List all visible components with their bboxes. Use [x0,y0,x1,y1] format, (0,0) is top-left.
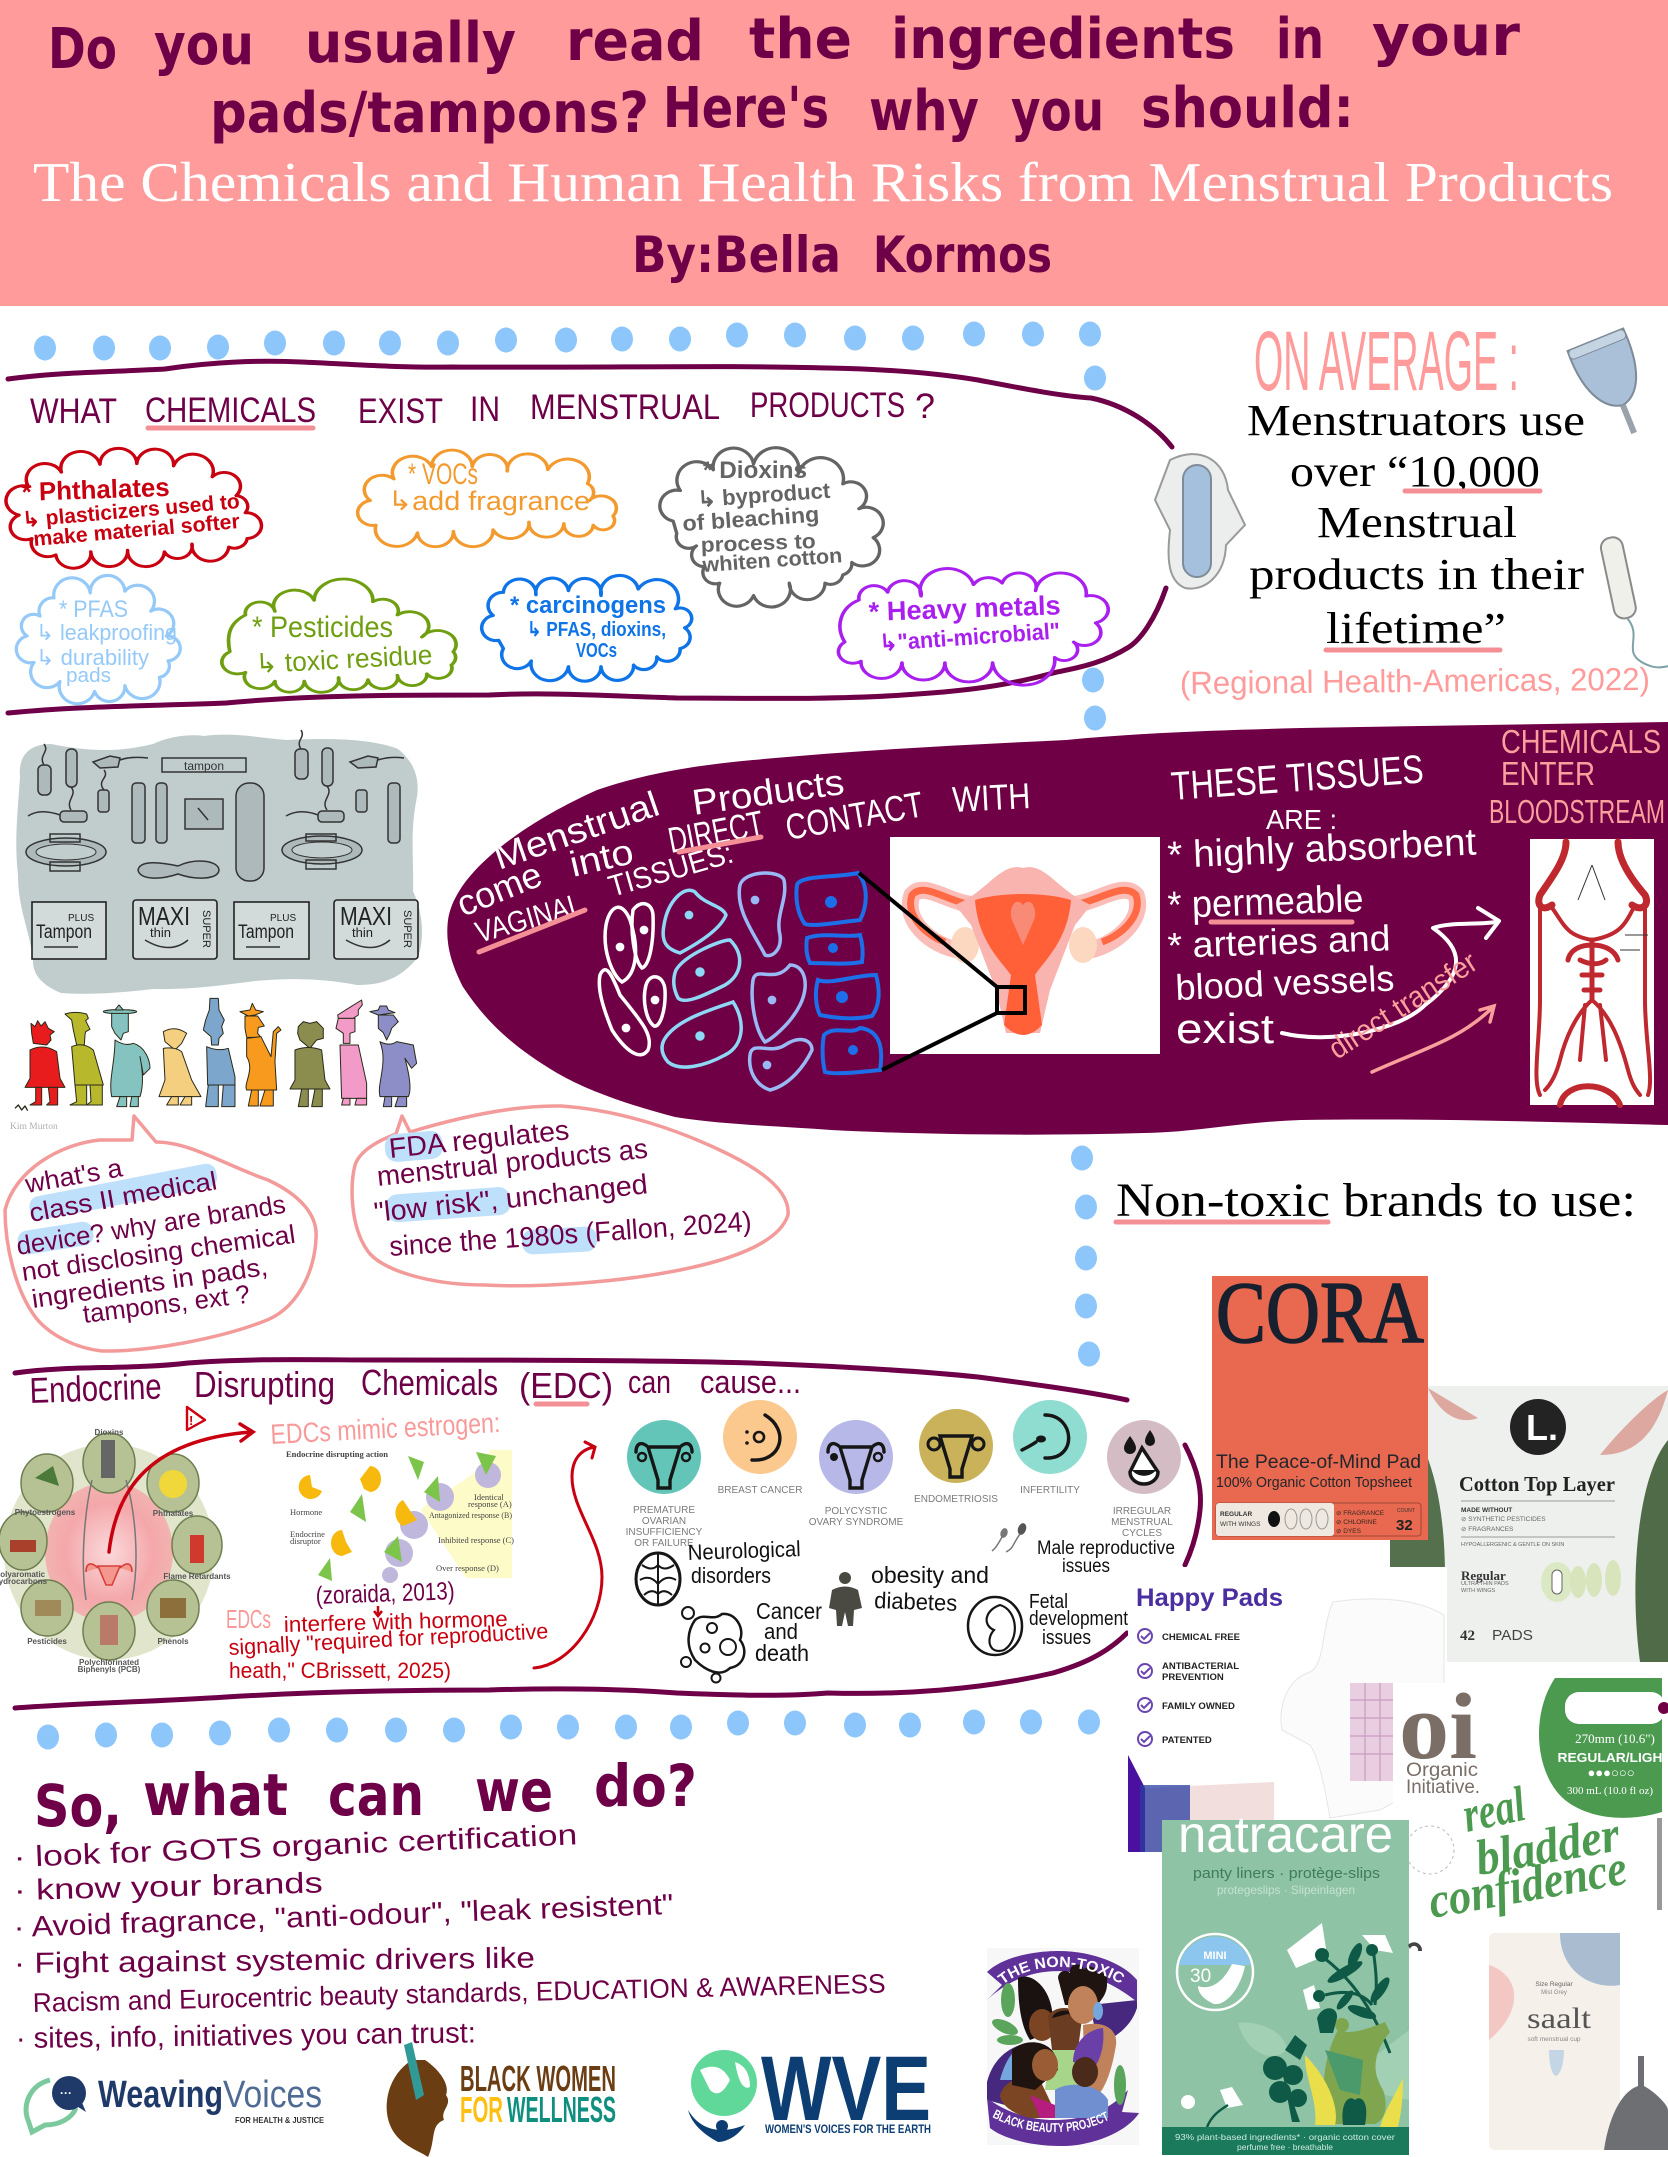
text: direct contact with vaginal tissues: into [566,830,637,885]
brand: happy pads: CHEMICAL FREE [1162,1632,1240,1643]
brand: L. cotton top layer: MADE WITHOUT [1461,1507,1512,1514]
arrow: white transfer arrow [1282,908,1499,1037]
quote text: products in their [1249,550,1584,599]
title: hand-lettered question: pads/tampons? [210,81,649,146]
icon: person with obesity and diabetes: diabetes [874,1587,958,1616]
health condition icons [626,1400,1181,1682]
speech bubble: FDA low risk: "low risk", unchanged [372,1168,649,1228]
brand: cora: ⊘ CHLORINE [1336,1519,1378,1526]
brand: cora: CORA [1216,1265,1424,1362]
icon: cancer cell: and [764,1619,798,1644]
brand: natracare: panty liners · protège-slips [1193,1865,1380,1882]
product boxes: Tampon [36,922,92,943]
cloud: VOCs [358,450,616,547]
brand: saalt menstrual cup: Size Regular [1535,1981,1573,1988]
cloud: pesticides: * Pesticides [252,611,393,644]
cloud: dioxins: * Dioxins [703,457,807,484]
product boxes: PLUS [270,913,296,924]
text: EDCs interfere with hormone: signally "required for reproductive [228,1618,549,1660]
brand: happy pads: ANTIBACTERIAL [1162,1661,1239,1672]
heading: chemicals enter bloodstream: ENTER [1501,755,1595,792]
title: hand-lettered question: read [566,9,704,74]
icon: embryo with fetal development issues [968,1591,1128,1655]
text: these tissues are [1167,747,1478,1052]
speech bubble: class II medical device: ingredients in pads, [30,1251,270,1314]
citation: (Regional Health-Americas, 2022) [1180,661,1650,701]
cloud: carcinogens: VOCs [576,640,617,662]
heading: Endocrine [29,1365,162,1411]
image: arterial system [1530,839,1654,1105]
action list: · Avoid fragrance, "anti-odour", "leak resistent" [13,1889,674,1944]
slogan: real bladder confidence: real [1458,1775,1530,1843]
icon: cancer cell: Cancer [756,1598,822,1624]
illustration: menstrual products on grey blob [16,730,422,994]
brand: natracare: protegeslips · Slipeinlagen [1217,1883,1355,1897]
text: these tissues are: * arteries and [1167,917,1391,966]
logo: weaving voices [26,2074,324,2132]
quote text [1247,396,1585,653]
speech bubble: class II medical device: tampons, ext ? [81,1279,251,1329]
arrow: pink transfer arrow [1372,1006,1494,1072]
logo: black women for wellness: BLACK WOMEN [460,2058,616,2099]
brand: organic initiative: 300 mL (10.0 fl oz) [1567,1785,1653,1797]
product boxes: MAXI [138,901,190,931]
brand: L. cotton top layer: ⊘ SYNTHETIC PESTICIDES [1461,1516,1546,1523]
brand: natracare: 93% plant-based ingredients* · organic cotton cover [1175,2132,1395,2142]
heading: cause... [700,1364,801,1400]
cloud: PFAS: ↳ durability [36,645,149,670]
brand: cora: 100% Organic Cotton Topsheet [1216,1474,1413,1491]
icon: person with obesity and diabetes: obesity and [871,1562,989,1588]
action list [13,1819,886,2055]
heading: WHAT [30,392,117,431]
brand: organic initiative [1393,1675,1668,1929]
icon: warning triangle [187,1407,205,1430]
citation: zoraida 2013: (zoraida, 2013) [315,1577,455,1610]
product boxes: PLUS [68,913,94,924]
brand: saalt menstrual cup: soft menstrual cup [1527,2036,1581,2043]
cloud: PFAS: * PFAS [59,596,128,623]
brand: organic initiative: Initiative. [1406,1777,1480,1798]
title: hand-lettered question: the [749,7,852,72]
cloud: carcinogens [482,575,692,681]
diagram: EDC sources wheel: Polychlorinated [79,1658,139,1667]
cloud: VOCs: * VOCs [408,458,478,491]
logo: non-toxic black beauty project [987,1951,1139,2146]
text: direct contact with vaginal tissues: come [451,853,548,924]
cloud: pesticides [222,579,456,692]
text: EDCs interfere with hormone: interfere with hormone [283,1606,508,1637]
brand: happy pads: PATENTED [1162,1735,1212,1746]
icon: embryo with fetal development issues: development [1029,1608,1128,1630]
panel: on average statistic [1155,314,1668,701]
icon: brain with neurological disorders: Neurological [687,1536,801,1565]
logo: women's voices for the earth [688,2038,931,2142]
action list: Racism and Eurocentric beauty standards, EDUCATION & AWARENESS [32,1969,886,2018]
heading: can [328,1761,424,1829]
diagram: EDC sources wheel: Phthalates [153,1509,194,1518]
icon: infertility [1013,1400,1087,1496]
speech bubble: FDA low risk [352,1106,788,1286]
quote text: Menstruators use [1247,396,1585,445]
brand: organic initiative: Organic [1406,1760,1478,1781]
cloud: phthalates [6,448,261,568]
diagram: EDC sources wheel: Flame Retardants [163,1572,231,1581]
text: these tissues are: * permeable [1167,878,1364,927]
brand: organic initiative: oi [1399,1675,1477,1779]
heading: non-toxic brands: Non-toxic brands to use: [1116,1174,1636,1227]
brand: happy pads [1128,1567,1447,1852]
quote text: over “10,000 [1290,447,1540,496]
heading: can [628,1364,671,1400]
logo: women's voices for the earth: WOMEN'S VOICES FOR THE EARTH [765,2124,931,2136]
icon: person with obesity and diabetes [829,1562,989,1626]
title: hand-lettered question [48,4,1520,146]
brand: saalt menstrual cup [1489,1933,1668,2150]
brand: organic initiative: REGULAR/LIGH [1558,1750,1662,1765]
icon: polycystic ovary syndrome [809,1420,904,1528]
title: hand-lettered question: why [869,79,979,144]
byline: By:Bella [632,226,841,284]
slogan: real bladder confidence: confidence [1424,1839,1631,1929]
brand: cora [1212,1265,1428,1540]
heading: CHEMICALS [145,391,316,430]
cloud: dioxins [660,448,883,607]
title: hand-lettered question: Here's [663,76,829,141]
panel: what chemicals exist [6,361,1172,713]
icon: tampon [1599,528,1668,676]
brand: cora: ⊘ DYES [1336,1528,1362,1535]
icon: warning triangle: ! [189,1413,193,1428]
label: direct transfer: direct transfer [1323,946,1483,1066]
cloud: pesticides: ↳ toxic residue [255,640,433,679]
illustrator credit: Kim Murton [10,1122,58,1132]
icon: irregular menstrual cycles: IRREGULAR [1113,1506,1171,1517]
heading: we [475,1757,553,1825]
label: EDCs mimic estrogen: EDCs mimic estrogen: [270,1407,501,1450]
brand: natracare: 30 [1190,1966,1211,1987]
brand: L. cotton top layer: WITH WINGS [1461,1588,1496,1594]
brand: natracare: MINI [1203,1950,1227,1962]
action list: · look for GOTS organic certification [13,1819,578,1874]
diagram: EDC sources wheel: Biphenyls (PCB) [78,1665,141,1674]
diagram: EDC sources wheel: Phytoestrogens [15,1508,76,1517]
brand: L. cotton top layer [1390,1386,1668,1662]
arrow: small red down [374,1606,382,1616]
icon: sperm with male reproductive issues [992,1522,1175,1577]
icon: premature ovarian insufficiency: PREMATURE [633,1505,695,1516]
diagram: endocrine disrupting action: Over response (D) [436,1563,499,1573]
text: EDCs interfere with hormone: heath," CBrissett, 2025) [229,1658,451,1683]
heading [30,386,935,431]
heading: So, [34,1772,122,1840]
icon: sperm with male reproductive issues: issues [1062,1556,1110,1577]
brand: natracare [1162,1806,1409,2155]
logo: black women for wellness: WELLNESS [507,2089,616,2130]
image: uterus anatomy [890,837,1160,1054]
text: these tissues are: exist [1176,1005,1274,1052]
icon: premature ovarian insufficiency: OVARIAN [642,1516,686,1527]
icon: irregular menstrual cycles [1107,1420,1181,1539]
brand: cora: 32 [1396,1517,1413,1534]
cloud: PFAS: ↳ leakproofing [36,620,177,645]
title: hand-lettered question: Do [48,17,117,82]
logo: black women for wellness [387,2042,616,2157]
icon: menstrual cup [1567,328,1661,445]
cloud: carcinogens: ↳ PFAS, dioxins, [527,619,666,641]
cloud: phthalates: * Phthalates [21,472,170,507]
diagram: endocrine disrupting action: Endocrine disrupting action [286,1449,388,1459]
byline [632,226,1052,284]
diagram: endocrine disrupting action: response (A) [468,1499,512,1509]
cloud: carcinogens: * carcinogens [510,592,666,619]
slogan: real bladder confidence [1424,1775,1631,1929]
text: EDCs interfere with hormone [226,1604,549,1683]
icon: embryo with fetal development issues: issues [1042,1627,1091,1649]
speech bubble: FDA low risk: since the 1980s (Fallon, 2024) [388,1206,753,1262]
logo: weaving voices: Voices [223,2074,322,2116]
brand: happy pads: FAMILY OWNED [1162,1701,1235,1712]
arrow: red curve to conditions [534,1442,602,1668]
logo: women's voices for the earth: WVE [761,2038,931,2140]
heading [29,1362,801,1411]
slogan: real bladder confidence: bladder [1471,1805,1624,1886]
arrow: red from uterus to estrogen [109,1424,253,1552]
diagram: EDC sources wheel [0,1428,231,1674]
brand: saalt menstrual cup: Mist Grey [1541,1990,1567,1996]
diagram: endocrine disrupting action: Antagonized response (B) [429,1510,512,1520]
cloud: PFAS [16,575,180,704]
speech bubble: class II medical device: not disclosing chemical [20,1219,297,1287]
diagram: endocrine disrupting action [286,1449,514,1583]
cloud: PFAS: pads [66,665,111,687]
icon: premature ovarian insufficiency: OR FAILURE [634,1538,694,1549]
icon: endometriosis [914,1409,998,1505]
logo: non-toxic black beauty project: BLACK BEAUTY PROJECT [992,2109,1108,2132]
title: hand-lettered question: you [1011,79,1104,144]
text: these tissues are: * highly absorbent [1167,822,1478,877]
text: direct contact with vaginal tissues: CONTACT [782,783,926,848]
text: these tissues are: blood vessels [1175,957,1395,1008]
diagram: EDC sources wheel: Dioxins [95,1428,124,1437]
icon: endometriosis: ENDOMETRIOSIS [914,1494,998,1505]
text: direct contact with vaginal tissues: WITH [951,775,1031,820]
panel: direct contact maroon shape [447,722,1668,1135]
icon: infertility: INFERTILITY [1020,1485,1080,1496]
cloud: heavy metals: ↳"anti-microbial" [879,617,1061,656]
product boxes: SUPER [200,910,212,948]
product boxes: thin [150,925,171,940]
diagram: endocrine disrupting action: disruptor [290,1536,321,1546]
action list: · know your brands [13,1867,323,1907]
cloud: VOCs: ↳add fragrance [388,486,590,516]
title: hand-lettered question: your [1372,4,1520,69]
icon: premature ovarian insufficiency: INSUFFICIENCY [626,1527,703,1538]
brand: cora: COUNT [1397,1508,1415,1514]
icon: embryo with fetal development issues: Fetal [1029,1591,1068,1613]
logo: black women for wellness: FOR [460,2089,503,2130]
brand: natracare: perfume free · breathable [1237,2142,1333,2152]
text: direct contact with vaginal tissues: Products [689,761,847,823]
action list: · Fight against systemic drivers like [14,1943,535,1980]
icon: breast cancer: BREAST CANCER [718,1485,802,1496]
product boxes: SUPER [401,910,413,948]
action list: · sites, info, initiatives you can trust: [16,2017,476,2055]
small fragment icon [1408,1942,1422,1951]
heading: MENSTRUAL [530,388,720,427]
cloud: dioxins: ↳ byproduct [697,478,832,512]
brand: happy pads: Happy Pads [1136,1584,1283,1612]
heading: ? [915,387,935,426]
brand: L. cotton top layer: Cotton Top Layer [1459,1472,1615,1496]
icon: cancer cell [681,1598,822,1682]
text: these tissues are: ARE : [1266,804,1337,835]
zoom callout lines [859,873,1025,1070]
diagram: endocrine disrupting action: Hormone [290,1507,322,1517]
speech bubble: class II medical device: device? why are brands [14,1189,288,1261]
title: hand-lettered question: usually [305,11,516,76]
text: direct contact with vaginal tissues: Menstrual [488,783,664,878]
brand: cora: REGULAR [1220,1511,1252,1518]
icon: polycystic ovary syndrome: OVARY SYNDROME [809,1517,904,1528]
panel: endocrine disrupting chemicals [0,1360,1200,1708]
section: what can we do [13,1752,886,2055]
brand: L. cotton top layer: ULTRA THIN PADS [1461,1581,1509,1587]
brand: L. cotton top layer: 42 [1460,1628,1475,1644]
icon: brain with neurological disorders: disorders [691,1563,771,1588]
text: direct contact with vaginal tissues [451,761,1031,950]
icon: irregular menstrual cycles: CYCLES [1122,1528,1162,1539]
brand: cora: ⊘ FRAGRANCE [1336,1510,1385,1517]
cloud: dioxins: of bleaching [682,501,820,536]
icon: polycystic ovary syndrome: POLYCYSTIC [825,1506,887,1517]
speech bubble: FDA low risk: FDA regulates [387,1114,571,1164]
brand: L. cotton top layer: ⊘ FRAGRANCES [1461,1526,1514,1533]
icon: breast cancer [718,1400,802,1496]
diagram: endocrine disrupting action: Inhibited response (C) [438,1535,514,1545]
brand: cora: WITH WINGS [1220,1521,1261,1528]
cloud: phthalates: ↳ plasticizers used to [21,490,241,532]
brand: organic initiative: ●●●○○○ [1587,1765,1635,1780]
speech bubble: FDA low risk: menstrual products as [375,1133,649,1192]
title: hand-lettered question: ingredients [891,7,1235,72]
illustration: row of colourful people [15,998,417,1111]
cloud: heavy metals: * Heavy metals [868,590,1061,627]
diagram: endocrine disrupting action: Identical [474,1492,504,1502]
byline: Kormos [873,226,1052,284]
illustration: menstrual products on grey blob: tampon [184,759,224,773]
title: hand-lettered question: you [154,13,254,78]
brand: happy pads: PREVENTION [1162,1672,1224,1683]
heading: what [143,1761,288,1829]
speech bubble: class II medical device: class II medical [27,1165,219,1228]
icon: irregular menstrual cycles: MENSTRUAL [1111,1517,1173,1528]
header banner [0,0,1668,306]
heading: EXIST [358,392,443,431]
speech bubble: class II medical device [5,1116,316,1351]
text: direct contact with vaginal tissues: TISSUES: [605,837,737,904]
heading [34,1752,697,1840]
logo: weaving voices: ··· [60,2086,72,2100]
heading: chemicals enter bloodstream [1489,723,1665,830]
product boxes: MAXI [340,901,392,931]
brand: L. cotton top layer: L. [1526,1407,1558,1448]
title: hand-lettered question: should: [1141,76,1354,141]
diagram: EDC sources wheel: Pesticides [27,1637,67,1646]
diagram: EDC sources wheel: Phenols [157,1637,189,1646]
brand: natracare: natracare [1178,1806,1393,1864]
icon: sperm with male reproductive issues: Male reproductive [1037,1538,1175,1559]
diagram: vaginal epithelial cells [599,873,881,1090]
brand: L. cotton top layer: PADS [1492,1627,1533,1644]
heading: Chemicals [361,1362,498,1403]
product boxes: thin [352,925,373,940]
logo: weaving voices: Weaving [98,2074,223,2116]
diagram: endocrine disrupting action: Endocrine [290,1529,325,1539]
text: direct contact with vaginal tissues: VAGINAL [472,888,587,950]
text: direct contact with vaginal tissues: DIRECT [665,802,767,861]
brand: organic initiative: 270mm (10.6") [1575,1731,1655,1746]
cloud: phthalates: make material softer [32,510,241,551]
product boxes: Tampon [238,922,294,943]
brand: cora: The Peace-of-Mind Pad [1216,1452,1421,1473]
quote text: lifetime” [1326,604,1506,653]
brand: L. cotton top layer: Regular [1461,1568,1506,1583]
icon: premature ovarian insufficiency [626,1420,703,1549]
heading: Disrupting [194,1364,335,1405]
subtitle: The Chemicals and Human Health Risks from Menstrual Products [33,152,1613,214]
icon: cancer cell: death [755,1640,809,1666]
text: these tissues are: THESE TISSUES [1170,747,1425,809]
speech bubble: class II medical device: what's a [22,1152,125,1199]
logo: non-toxic black beauty project: THE NON-TOXIC [996,1956,1124,1983]
cloud: dioxins: whiten cotton [701,544,843,577]
icon: brain with neurological disorders [636,1536,801,1605]
quote text: Menstrual [1317,498,1517,547]
cloud: heavy metals [838,569,1108,685]
heading: do? [594,1752,697,1820]
product boxes [32,900,418,959]
text: EDCs interfere with hormone: EDCs [226,1604,271,1634]
heading: IN [470,390,500,429]
logo: weaving voices: FOR HEALTH & JUSTICE [235,2115,324,2125]
icon: pad [1155,454,1245,589]
heading: (EDC) [519,1365,613,1406]
heading: PRODUCTS [750,386,905,425]
title: hand-lettered question: in [1276,7,1324,72]
brand: L. cotton top layer: HYPOALLERGENIC & GENTLE ON SKIN [1461,1542,1564,1548]
cloud: dioxins: process to [700,530,816,557]
brand: saalt menstrual cup: saalt [1527,2002,1592,2035]
